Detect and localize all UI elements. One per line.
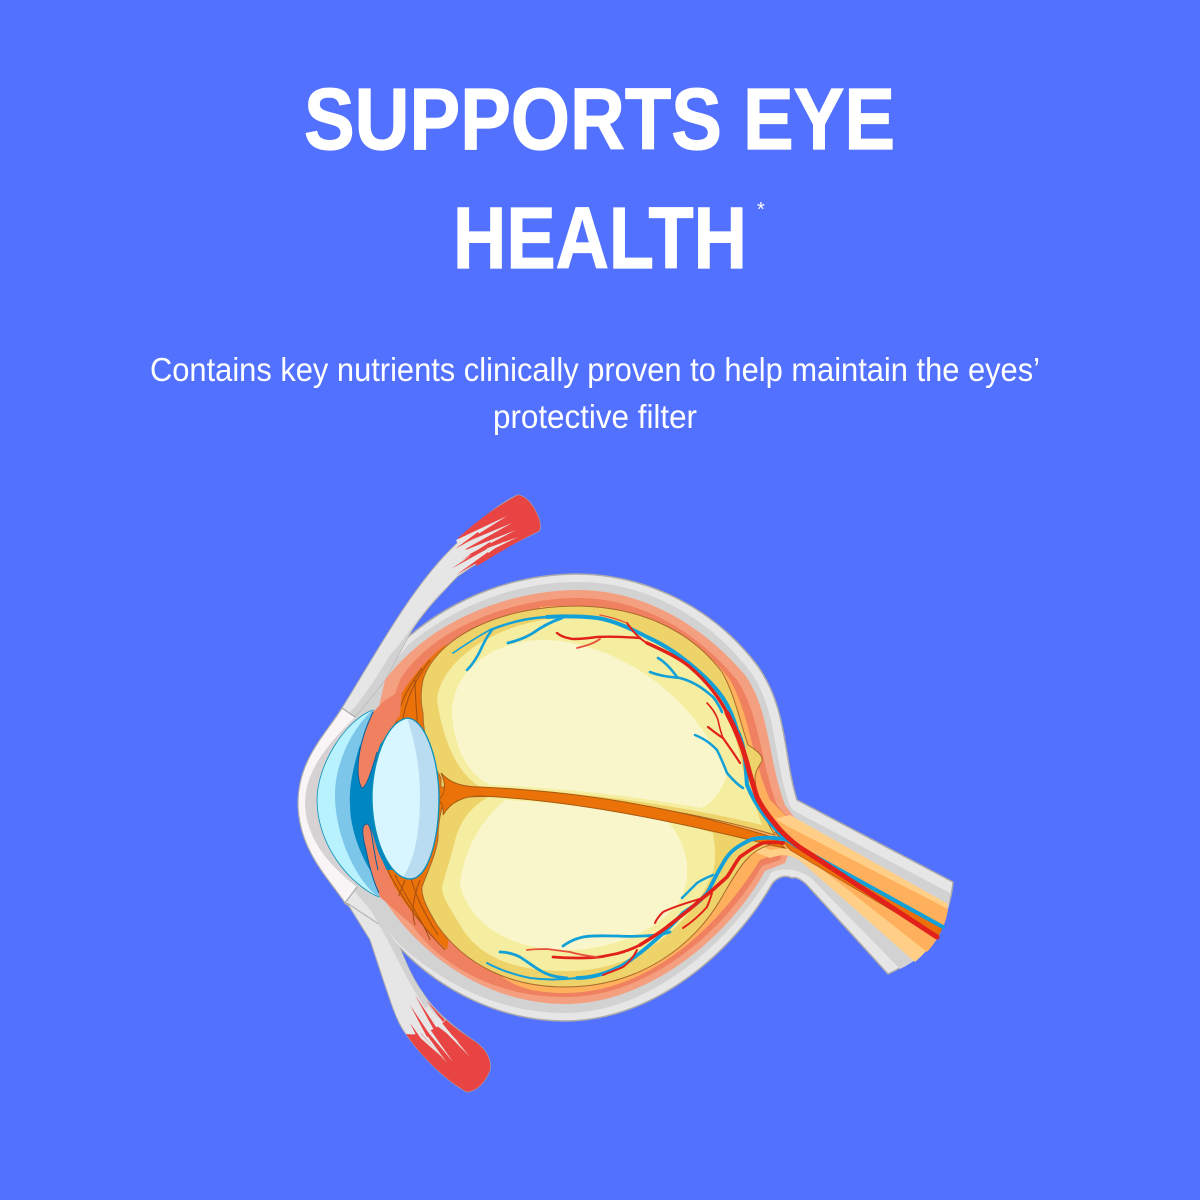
eye anatomy illustration	[298, 495, 953, 1092]
sclera inner layer	[345, 582, 950, 1013]
cornea outer wall	[298, 708, 380, 903]
subtitle text: Contains key nutrients clinically proven to help maintain the eyes’	[150, 351, 1040, 388]
retina orange layer	[500, 606, 800, 993]
ciliary body	[372, 645, 470, 950]
title: *	[757, 199, 765, 221]
title: HEALTH	[453, 190, 747, 287]
subtitle text: protective filter	[493, 398, 697, 435]
sclera outer layer	[342, 574, 953, 1021]
subtitle text	[150, 351, 1040, 435]
vitreous upper lobe	[421, 606, 775, 835]
choroid light layer	[358, 590, 800, 1004]
iris lower	[363, 824, 412, 925]
optic nerve	[750, 815, 948, 962]
vitreous lower lobe	[422, 796, 770, 987]
iris edge strokes	[358, 712, 379, 893]
central orange band	[439, 773, 785, 848]
upper eye muscle	[342, 495, 540, 717]
choroid dark layer	[372, 598, 795, 997]
lens	[372, 718, 439, 879]
blue retinal vessels	[453, 616, 943, 980]
cornea and anterior chamber	[317, 710, 392, 897]
iris upper	[358, 690, 402, 788]
lower eye muscle	[347, 895, 490, 1092]
red retinal vessels	[527, 615, 937, 975]
title: SUPPORTS EYE	[304, 71, 895, 168]
title	[304, 71, 895, 287]
